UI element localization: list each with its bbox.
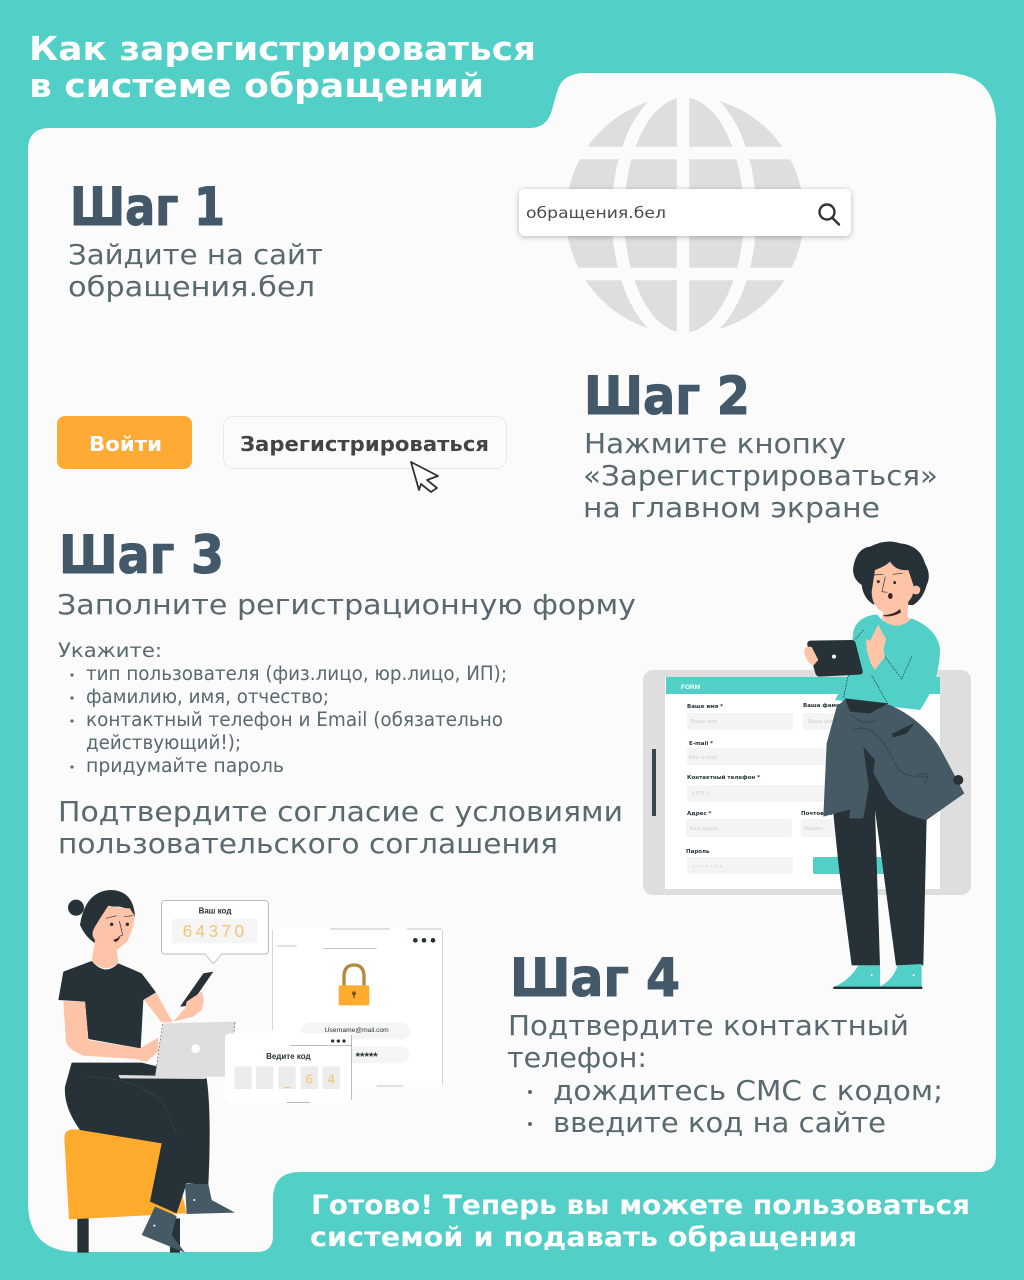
illustration: tablet with form: Ваш e-mail xyxy=(689,755,717,761)
search bar xyxy=(519,189,851,236)
trousers xyxy=(65,1063,210,1213)
icon: globe xyxy=(560,90,810,340)
step 3 text: пользовательского соглашения xyxy=(58,827,558,860)
step 3 text xyxy=(57,525,636,860)
bun and hair xyxy=(68,900,84,916)
illustration: tablet with form: Ваша фам xyxy=(808,719,835,725)
step 4 text: Подтвердите контактный xyxy=(508,1009,909,1042)
illustration: tablet with form: E-mail * xyxy=(689,741,713,747)
step 4 text: Шаг 4 xyxy=(510,948,680,1009)
illustration: seated woman with laptop and phone xyxy=(58,890,442,1253)
search bar: обращения.бел xyxy=(526,204,666,222)
code entry window: _ xyxy=(283,1073,291,1088)
shoes xyxy=(142,1184,235,1253)
step 2 text: «Зарегистрироваться» xyxy=(583,459,938,492)
button: register: Зарегистрироваться xyxy=(240,432,489,456)
step 4 text: дождитесь СМС с кодом; xyxy=(553,1074,943,1107)
trousers xyxy=(832,717,927,965)
upper body, head and tablet xyxy=(804,541,940,710)
title: в системе обращений xyxy=(29,66,484,105)
illustration: standing person with tablet xyxy=(804,541,964,989)
illustration: tablet with form: Ваше имя * xyxy=(687,704,723,710)
step 4 text xyxy=(507,948,943,1139)
step 4 text: введите код на сайте xyxy=(553,1106,886,1139)
shirt xyxy=(58,961,156,1048)
step 3 text: Шаг 3 xyxy=(59,525,224,586)
illustration: tablet with form: Адрес * xyxy=(687,811,712,817)
illustration: tablet with form: Ваша фамилия xyxy=(803,702,852,709)
illustration: tablet with form: Контактный телефон * xyxy=(687,774,760,781)
shoes xyxy=(833,964,922,987)
step 3 text: Заполните регистрационную форму xyxy=(57,588,636,621)
login window xyxy=(272,928,442,1087)
code entry window: Ведите код xyxy=(266,1052,311,1061)
step 2 text xyxy=(583,366,938,524)
icon: magnifier xyxy=(820,204,839,224)
button: register xyxy=(224,416,506,468)
icon: cursor xyxy=(411,462,438,492)
closing message: Готово! Теперь вы можете пользоваться xyxy=(311,1190,970,1221)
illustration: tablet with form xyxy=(643,670,971,895)
face and neck xyxy=(872,562,914,628)
illustration: tablet with form: Пароль xyxy=(686,849,710,855)
speech bubble with code: Ваш код xyxy=(199,906,231,915)
closing message: системой и подавать обращения xyxy=(310,1222,857,1253)
tablet in hand xyxy=(807,640,863,677)
step 3 text: Подтвердите согласие с условиями xyxy=(58,795,623,828)
arms xyxy=(63,1001,158,1062)
step 1 text: Шаг 1 xyxy=(70,177,225,238)
illustration: tablet with form: Ваше имя xyxy=(691,719,717,725)
illustration: tablet with form: Почтовый xyxy=(801,810,833,817)
step 1 text xyxy=(68,177,323,303)
hair xyxy=(853,541,929,605)
upper body and head xyxy=(58,890,213,1062)
list of required fields: действующий!); xyxy=(86,731,241,754)
illustration: tablet with form: FORM xyxy=(681,684,700,691)
login window: Username@mail.com xyxy=(325,1027,389,1034)
list of required fields: фамилию, имя, отчество; xyxy=(86,685,329,708)
illustration: tablet with form: • • • • • • • xyxy=(692,864,722,870)
speech bubble with code: 64370 xyxy=(183,921,247,941)
step 4 text: телефон: xyxy=(507,1041,647,1074)
phone xyxy=(180,972,213,1007)
tied jacket xyxy=(823,699,964,820)
code entry window xyxy=(225,1033,352,1103)
list of required fields: тип пользователя (физ.лицо, юр.лицо, ИП); xyxy=(86,662,507,685)
icon: padlock xyxy=(339,965,369,1005)
face and neck xyxy=(92,906,135,968)
list of required fields xyxy=(58,639,507,777)
step 2 text: Шаг 2 xyxy=(584,366,750,427)
speech bubble with code xyxy=(162,901,268,964)
login window: ***** xyxy=(356,1051,378,1063)
button: login: Войти xyxy=(89,432,162,456)
step 2 text: Нажмите кнопку xyxy=(584,427,846,460)
list of required fields: контактный телефон и Email (обязательно xyxy=(86,708,503,731)
code entry window: 6 xyxy=(305,1071,313,1086)
raised hand xyxy=(866,624,886,670)
sweater xyxy=(835,614,940,710)
code entry window: 4 xyxy=(327,1071,335,1086)
laptop xyxy=(118,1022,235,1079)
list of required fields: Укажите: xyxy=(58,639,162,662)
title xyxy=(29,29,536,105)
step 2 text: на главном экране xyxy=(583,491,880,524)
illustration: tablet with form: +375 () xyxy=(691,791,710,797)
stool xyxy=(77,1218,180,1253)
step 1 text: Зайдите на сайт xyxy=(68,238,323,271)
step 1 text: обращения.бел xyxy=(68,270,315,303)
list of required fields: придумайте пароль xyxy=(86,754,284,777)
title: Как зарегистрироваться xyxy=(29,29,536,68)
button: login xyxy=(57,416,192,469)
illustration: tablet with form: Ваш адрес xyxy=(690,826,718,832)
closing message xyxy=(310,1190,970,1253)
illustration: tablet with form: Индекс xyxy=(804,826,824,832)
